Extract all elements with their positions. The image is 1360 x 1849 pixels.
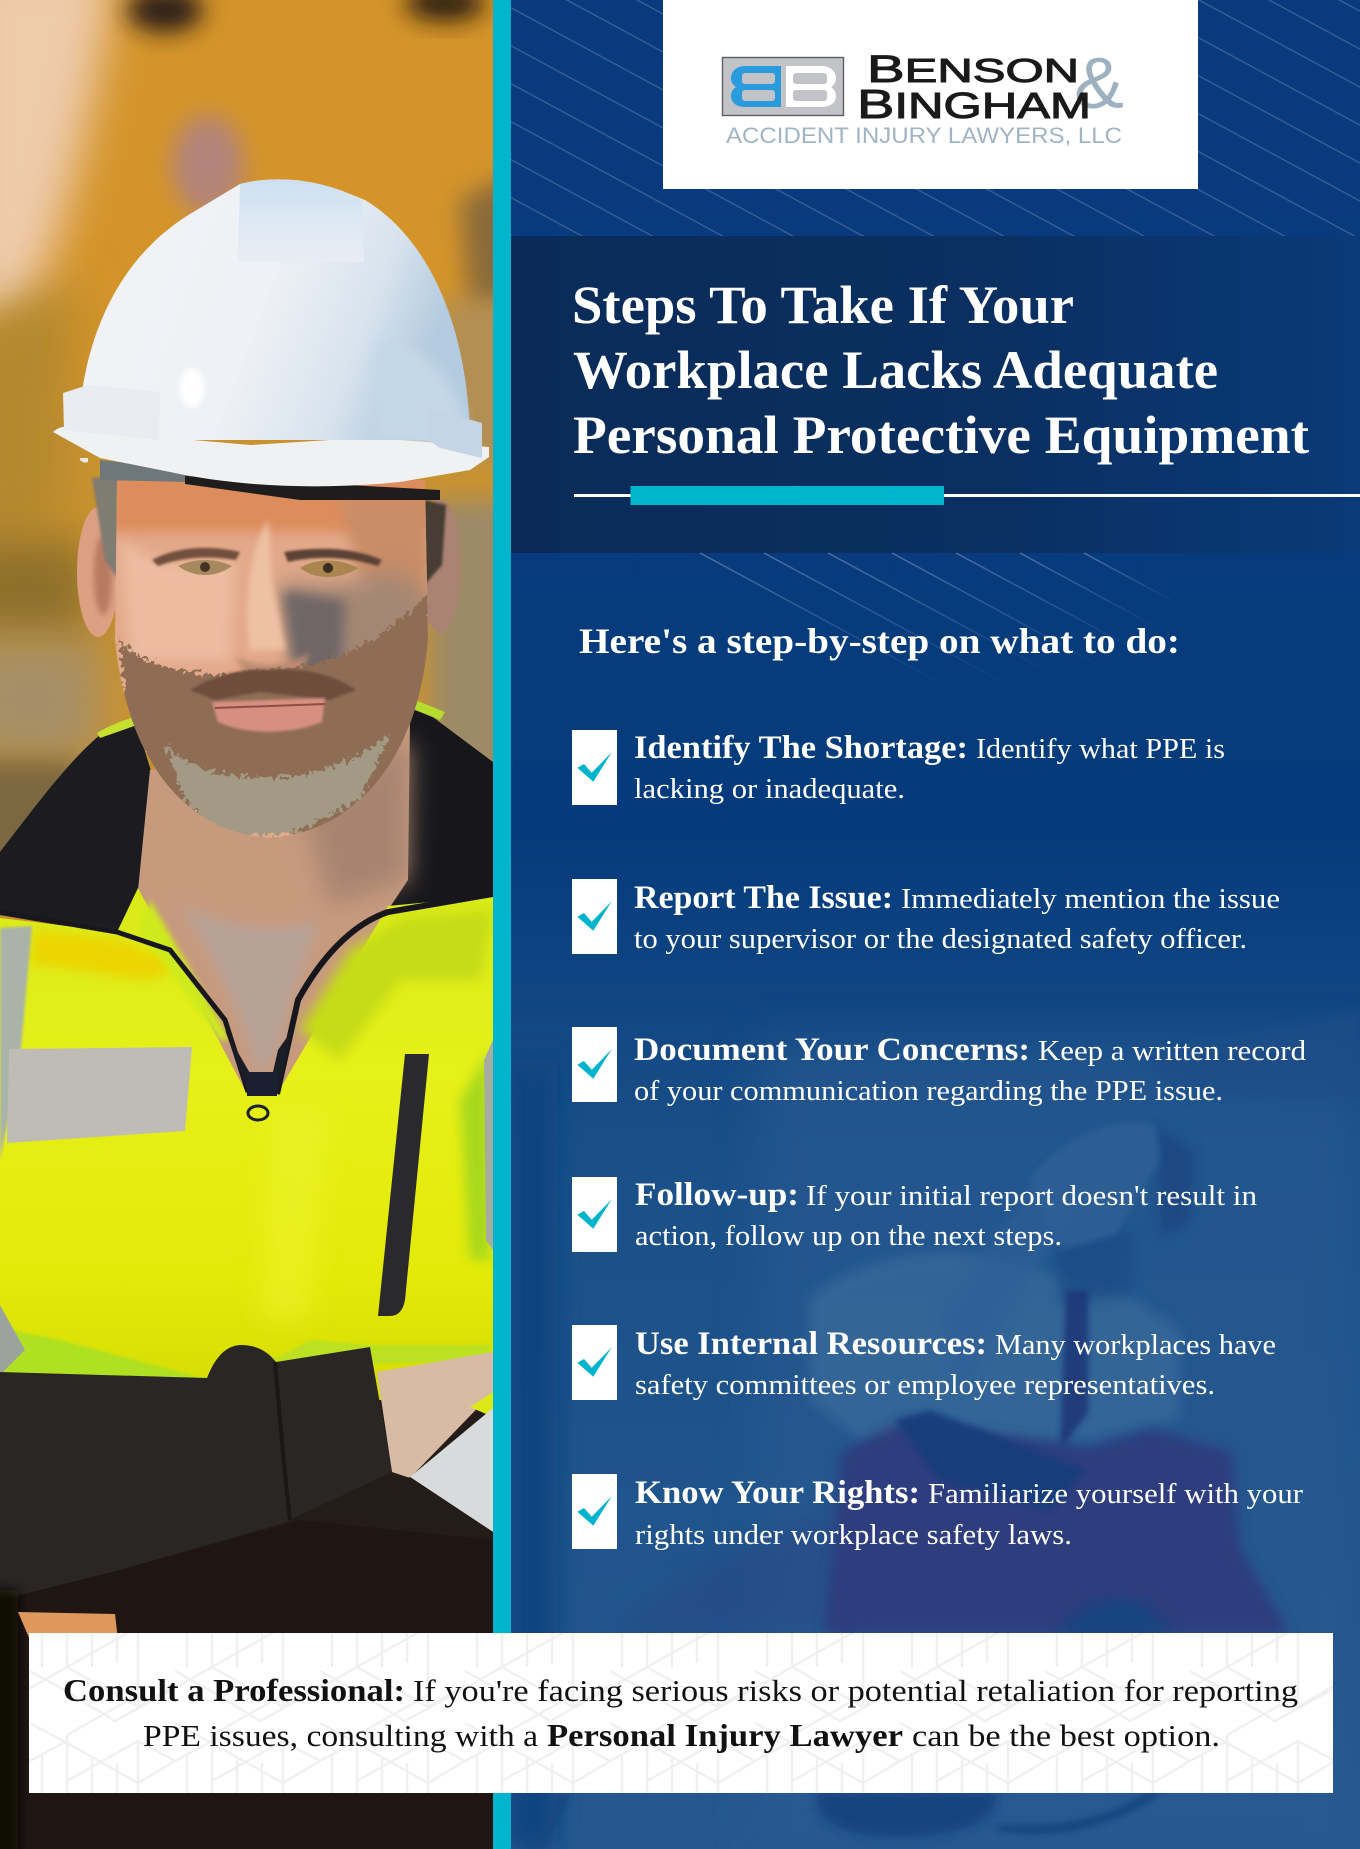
- title: [572, 275, 1309, 465]
- left ear: [77, 507, 119, 637]
- step: report the issue: Report The Issue:: [634, 880, 893, 916]
- background photo: worried worker, tinted blue: [505, 1010, 1360, 1849]
- callout: consult a professional: Consult a Professional:: [63, 1672, 405, 1708]
- reflective chest patch: [7, 1047, 192, 1143]
- hair: [91, 476, 117, 578]
- hand and wrist: [377, 1352, 493, 1478]
- step: document your concerns: Keep a written record: [1038, 1035, 1307, 1067]
- icon: checkbox: [572, 1325, 617, 1400]
- icon: checkbox: [572, 730, 617, 805]
- step: know your rights: Know Your Rights:: [635, 1475, 920, 1511]
- ampersand: &: [1074, 44, 1124, 124]
- beard: [120, 590, 430, 835]
- step: use internal resources: Many workplaces have: [995, 1329, 1276, 1361]
- step: know your rights: rights under workplace safety laws.: [635, 1519, 1072, 1551]
- panel: title band: [511, 236, 1360, 553]
- callout: consult a professional: Personal Injury Lawyer: [547, 1717, 903, 1753]
- icon: checkbox: [572, 1474, 617, 1549]
- step: report the issue: to your supervisor or the designated safety officer.: [634, 923, 1247, 955]
- icon: checkbox: [572, 1027, 617, 1102]
- step: follow-up: action, follow up on the next steps.: [635, 1220, 1062, 1252]
- bottom dark clothing: [0, 1520, 493, 1849]
- step: follow-up: Follow-up:: [635, 1177, 799, 1213]
- logo card: B INGHAM: [857, 81, 1091, 127]
- tagline: ACCIDENT INJURY LAWYERS, LLC: [726, 123, 1122, 148]
- firm name: B ENSON: [867, 49, 1079, 91]
- title: Personal Protective Equipment: [573, 405, 1309, 465]
- callout: consult a professional: [29, 1633, 1333, 1793]
- step: identify the shortage: [572, 730, 1225, 805]
- title: Workplace Lacks Adequate: [573, 340, 1218, 400]
- zip and placket: [34, 919, 247, 1093]
- reflective side strip: [0, 926, 32, 1160]
- neck and chest: [138, 720, 410, 1096]
- step: know your rights: Familiarize yourself with your: [928, 1478, 1303, 1510]
- title underline: [574, 486, 1360, 505]
- step: document your concerns: of your communication regarding the PPE issue.: [634, 1075, 1223, 1107]
- icon: checkbox: [572, 1177, 617, 1252]
- lower sleeves: [408, 1477, 493, 1532]
- step: use internal resources: [572, 1325, 1276, 1401]
- helmet harness: [100, 460, 190, 482]
- subheading: Here's a step-by-step on what to do:: [579, 621, 1180, 661]
- step: use internal resources: safety committees or employee representatives.: [635, 1369, 1215, 1401]
- face: [110, 470, 435, 840]
- step: follow-up: If your initial report doesn't result in: [806, 1180, 1258, 1212]
- icon: BB monogram: [722, 58, 844, 116]
- dark base under the arms: [298, 1400, 493, 1532]
- icon: checkbox: [572, 879, 617, 954]
- step: report the issue: Immediately mention the issue: [901, 883, 1280, 915]
- title: Steps To Take If Your: [572, 275, 1074, 335]
- step: identify the shortage: lacking or inadequate.: [634, 773, 905, 805]
- callout: consult a professional: can be the best option.: [912, 1718, 1220, 1753]
- decorative diagonal lines under the title band: [700, 553, 1180, 688]
- eyes and brows: [152, 548, 382, 577]
- panel: photo of construction worker: [0, 0, 493, 1849]
- step: know your rights: [572, 1474, 1303, 1551]
- teal vertical divider: [493, 0, 511, 1849]
- right ear: [427, 500, 461, 632]
- blurred site background: [0, 0, 493, 852]
- step: document your concerns: [572, 1027, 1307, 1107]
- crossed arm: [0, 1345, 392, 1606]
- logo card: [663, 0, 1198, 189]
- step: identify the shortage: Identify what PPE is: [976, 733, 1225, 765]
- callout: consult a professional: PPE issues, consulting with a: [143, 1718, 538, 1753]
- white cuff: [410, 1408, 493, 1532]
- step: document your concerns: Document Your Concerns:: [634, 1032, 1030, 1068]
- high-visibility jacket: [0, 888, 493, 1400]
- callout: consult a professional: If you're facing serious risks or potential retaliation for reporting: [413, 1673, 1298, 1708]
- panel: right navy background: [505, 0, 1360, 1849]
- jacket collar: [0, 726, 151, 930]
- white hard hat: [53, 179, 489, 486]
- chest pocket zip: [378, 1054, 429, 1316]
- step: use internal resources: Use Internal Resources:: [635, 1326, 987, 1362]
- step: identify the shortage: Identify The Shortage:: [634, 730, 968, 766]
- step: follow-up: [572, 1177, 1258, 1252]
- step: report the issue: [572, 879, 1280, 955]
